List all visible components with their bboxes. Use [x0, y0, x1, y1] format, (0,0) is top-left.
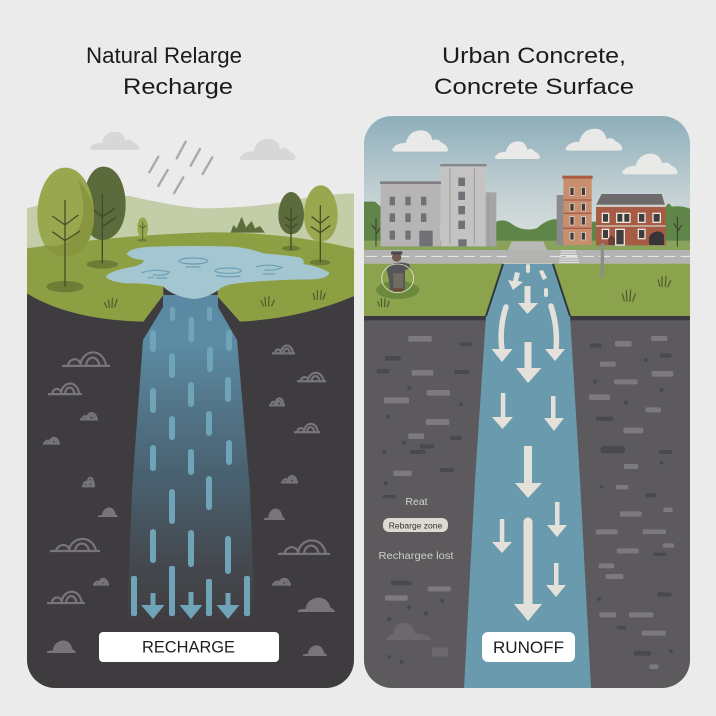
- title: natural recharge: Recharge: [123, 74, 233, 99]
- tree right light: [304, 185, 338, 265]
- crosswalk: [559, 250, 579, 263]
- tree large dark: [83, 167, 126, 269]
- brick house: [596, 194, 666, 245]
- lower concrete pebbles: [383, 471, 674, 669]
- infiltration droplets: [131, 307, 250, 616]
- road markings: [366, 256, 690, 257]
- subsurface rocks: [43, 346, 335, 656]
- pond: [106, 246, 329, 299]
- tree right dark: [278, 192, 304, 251]
- concrete ground: [364, 316, 690, 688]
- ground edge: [363, 316, 693, 320]
- pill: recharge zone: Rebarge zone: [389, 520, 442, 530]
- title: urban concrete: [434, 43, 634, 99]
- label: reat: Reat: [405, 496, 428, 508]
- panel: natural recharge: [27, 132, 357, 690]
- shrub: [231, 217, 265, 233]
- shrubs by house: [608, 231, 664, 245]
- small sapling: [137, 217, 148, 242]
- runoff arrows: [492, 264, 567, 621]
- concrete pebbles: [377, 336, 673, 476]
- title: urban concrete: Urban Concrete,: [442, 43, 626, 68]
- grass tufts: [378, 277, 671, 307]
- water infiltration column: [128, 295, 254, 592]
- hills: [27, 193, 354, 249]
- city scene: [363, 129, 693, 320]
- brick tower: [557, 176, 593, 245]
- soil labels: [378, 496, 454, 562]
- cloud right: [240, 139, 296, 160]
- title: natural recharge: Natural Relarge: [86, 43, 242, 68]
- soil ground: [27, 280, 354, 690]
- label: runoff: RUNOFF: [493, 638, 564, 657]
- tree large light: [37, 168, 94, 292]
- clouds: [392, 129, 678, 174]
- recharge arrows: [141, 592, 240, 619]
- grass: [363, 264, 692, 316]
- grass: [27, 232, 357, 322]
- title: urban concrete: Concrete Surface: [434, 74, 634, 99]
- runoff channel: [464, 264, 591, 688]
- sky: [364, 116, 690, 240]
- road: [363, 250, 692, 264]
- label: recharge lost: Rechargee lost: [378, 550, 454, 562]
- side street: [508, 241, 547, 251]
- lawn strip: [363, 241, 692, 251]
- panel: urban concrete: [363, 116, 693, 688]
- street sign pole: [601, 243, 604, 277]
- label: recharge: RECHARGE: [142, 638, 235, 656]
- street trees: [372, 217, 682, 247]
- label: recharge: [99, 632, 279, 662]
- person with ring: [376, 251, 419, 299]
- background treeline: [363, 202, 692, 243]
- scene: rain, hills, trees, pond: [27, 132, 357, 322]
- cloud left: [90, 132, 139, 150]
- channel banks: [486, 264, 570, 316]
- pond ripples: [142, 258, 282, 278]
- label: runoff: [482, 632, 575, 662]
- rain streaks: [149, 142, 212, 193]
- grass tufts: [105, 291, 325, 308]
- gray office building: [380, 164, 496, 246]
- title: natural recharge: [86, 43, 242, 99]
